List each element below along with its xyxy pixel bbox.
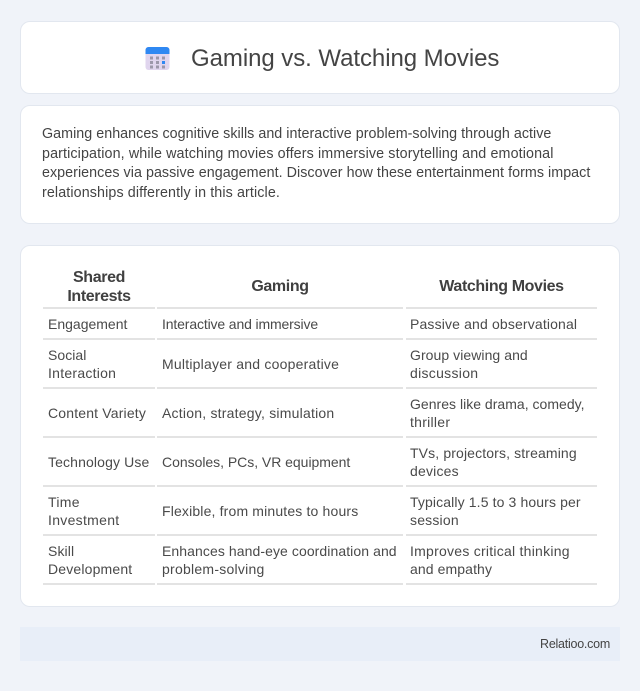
- row: Engagement: Engagement: [48, 316, 127, 332]
- row: Time Investment: Typically 1.5 to 3 hours per: [410, 494, 581, 510]
- text: footer brand: Relatioo.com: [540, 637, 610, 651]
- row: Time Investment: [48, 494, 581, 528]
- row: Content Variety: Content Variety: [48, 405, 146, 421]
- heading: Shared Interests: Shared: [73, 269, 125, 286]
- row: Technology Use: devices: [410, 463, 459, 479]
- row: Technology Use: TVs, projectors, streaming: [410, 445, 577, 461]
- row: Content Variety: thriller: [410, 414, 450, 430]
- text: intro line 2: participation, while watching movies offers immersive storytelling and emotional: [42, 146, 554, 162]
- icon: calendar: [146, 47, 170, 70]
- row: Social Interaction: Interaction: [48, 365, 116, 381]
- row: Time Investment: Flexible, from minutes to hours: [162, 503, 358, 519]
- row: Social Interaction: [48, 347, 528, 381]
- row: Time Investment: Investment: [48, 512, 119, 528]
- row: Technology Use: Consoles, PCs, VR equipment: [162, 454, 350, 470]
- title: Gaming vs. Watching Movies: [191, 45, 499, 72]
- row: Engagement: Passive and observational: [410, 316, 577, 332]
- row: Social Interaction: discussion: [410, 365, 478, 381]
- footer: [20, 627, 620, 661]
- row: Engagement: Interactive and immersive: [162, 316, 318, 332]
- row: Social Interaction: Multiplayer and cooperative: [162, 356, 339, 372]
- row: Skill Development: Enhances hand-eye coordination and: [162, 543, 397, 559]
- row: Technology Use: Technology Use: [48, 454, 149, 470]
- text: intro line 1: Gaming enhances cognitive skills and interactive problem-solving through active: [42, 126, 551, 142]
- row: Skill Development: Skill: [48, 543, 74, 559]
- text: intro line 4: relationships differently in this article.: [42, 184, 280, 200]
- row: Content Variety: Action, strategy, simulation: [162, 405, 334, 421]
- row: Content Variety: [48, 396, 585, 430]
- panel: comparison table: [20, 245, 620, 607]
- panel: intro text: [20, 105, 620, 224]
- row: Skill Development: [48, 543, 570, 577]
- row: Engagement: [48, 316, 577, 332]
- text: intro line 3: experiences via passive engagement. Discover how these entertainment forms impact: [42, 165, 590, 181]
- row: Social Interaction: Group viewing and: [410, 347, 528, 363]
- row: Social Interaction: Social: [48, 347, 86, 363]
- row: Time Investment: Time: [48, 494, 80, 510]
- heading: Watching Movies: Watching Movies: [439, 278, 564, 295]
- row: Skill Development: and empathy: [410, 561, 492, 577]
- heading: Gaming: Gaming: [251, 278, 309, 295]
- heading: Shared Interests: Interests: [67, 288, 131, 305]
- row: Time Investment: session: [410, 512, 459, 528]
- row: Skill Development: Development: [48, 561, 132, 577]
- row: Skill Development: problem-solving: [162, 561, 265, 577]
- heading: Shared Interests: [67, 269, 131, 305]
- row: Skill Development: Improves critical thinking: [410, 543, 570, 559]
- panel: title header: [20, 21, 620, 94]
- row: Technology Use: [48, 445, 577, 479]
- row: Content Variety: Genres like drama, comedy,: [410, 396, 585, 412]
